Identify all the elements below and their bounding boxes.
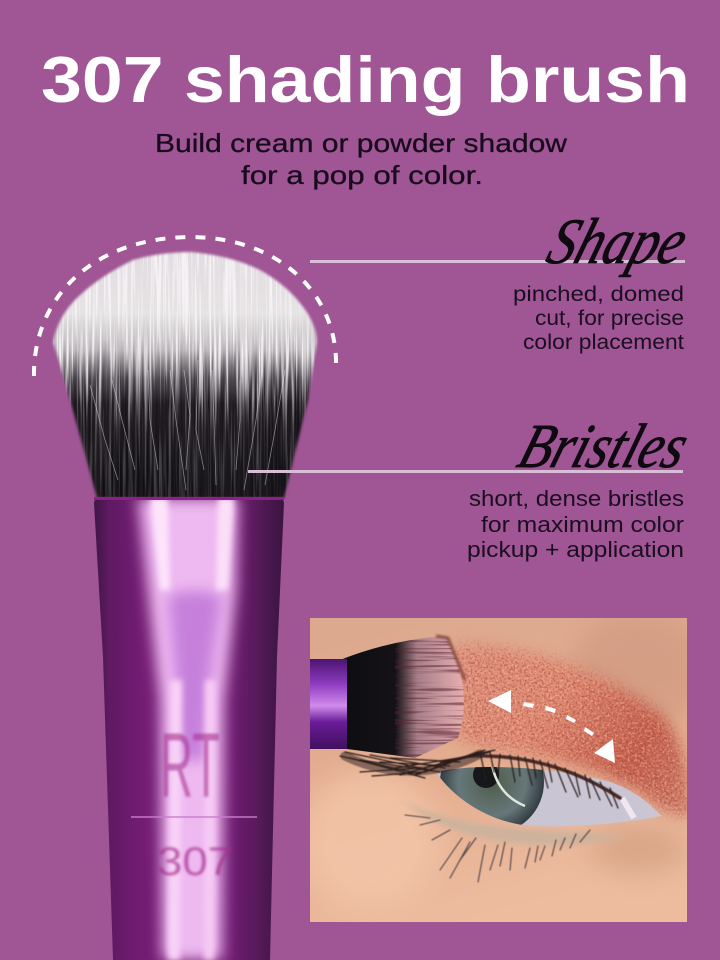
bristles description: short, dense bristles xyxy=(469,486,684,511)
bristles description xyxy=(467,486,685,562)
leader line: shape xyxy=(310,260,685,263)
leader line: bristles xyxy=(248,470,683,473)
shape description: pinched, domed xyxy=(513,283,684,306)
bristles description: for maximum color xyxy=(481,512,685,537)
script heading: shape: Shape xyxy=(539,206,697,277)
brush handle: RT xyxy=(160,715,220,817)
shape description: color placement xyxy=(523,331,684,354)
applicator handle xyxy=(310,659,347,749)
handle number: 307 xyxy=(157,840,233,884)
handle highlight xyxy=(138,498,238,960)
eye xyxy=(436,767,662,826)
bristles description: pickup + application xyxy=(467,537,684,562)
title: 307 shading brush xyxy=(41,43,690,116)
eyeshadow xyxy=(452,637,687,824)
shape description xyxy=(513,283,684,354)
brush handle xyxy=(90,495,290,960)
script heading: bristles: Bristles xyxy=(510,412,697,481)
subtitle xyxy=(155,128,567,190)
upper lashes xyxy=(340,750,620,808)
lower lashes xyxy=(400,800,625,882)
photo: brush applying eyeshadow xyxy=(310,618,687,922)
brush ferrule edge xyxy=(94,497,284,500)
applicator bristles xyxy=(342,637,464,758)
handle rule xyxy=(131,816,257,818)
subtitle: for a pop of color. xyxy=(241,160,483,190)
brush bristles xyxy=(52,250,318,500)
dashed shape arc xyxy=(34,237,336,376)
subtitle: Build cream or powder shadow xyxy=(155,128,567,158)
direction arrow xyxy=(488,690,615,763)
shape description: cut, for precise xyxy=(535,307,684,330)
